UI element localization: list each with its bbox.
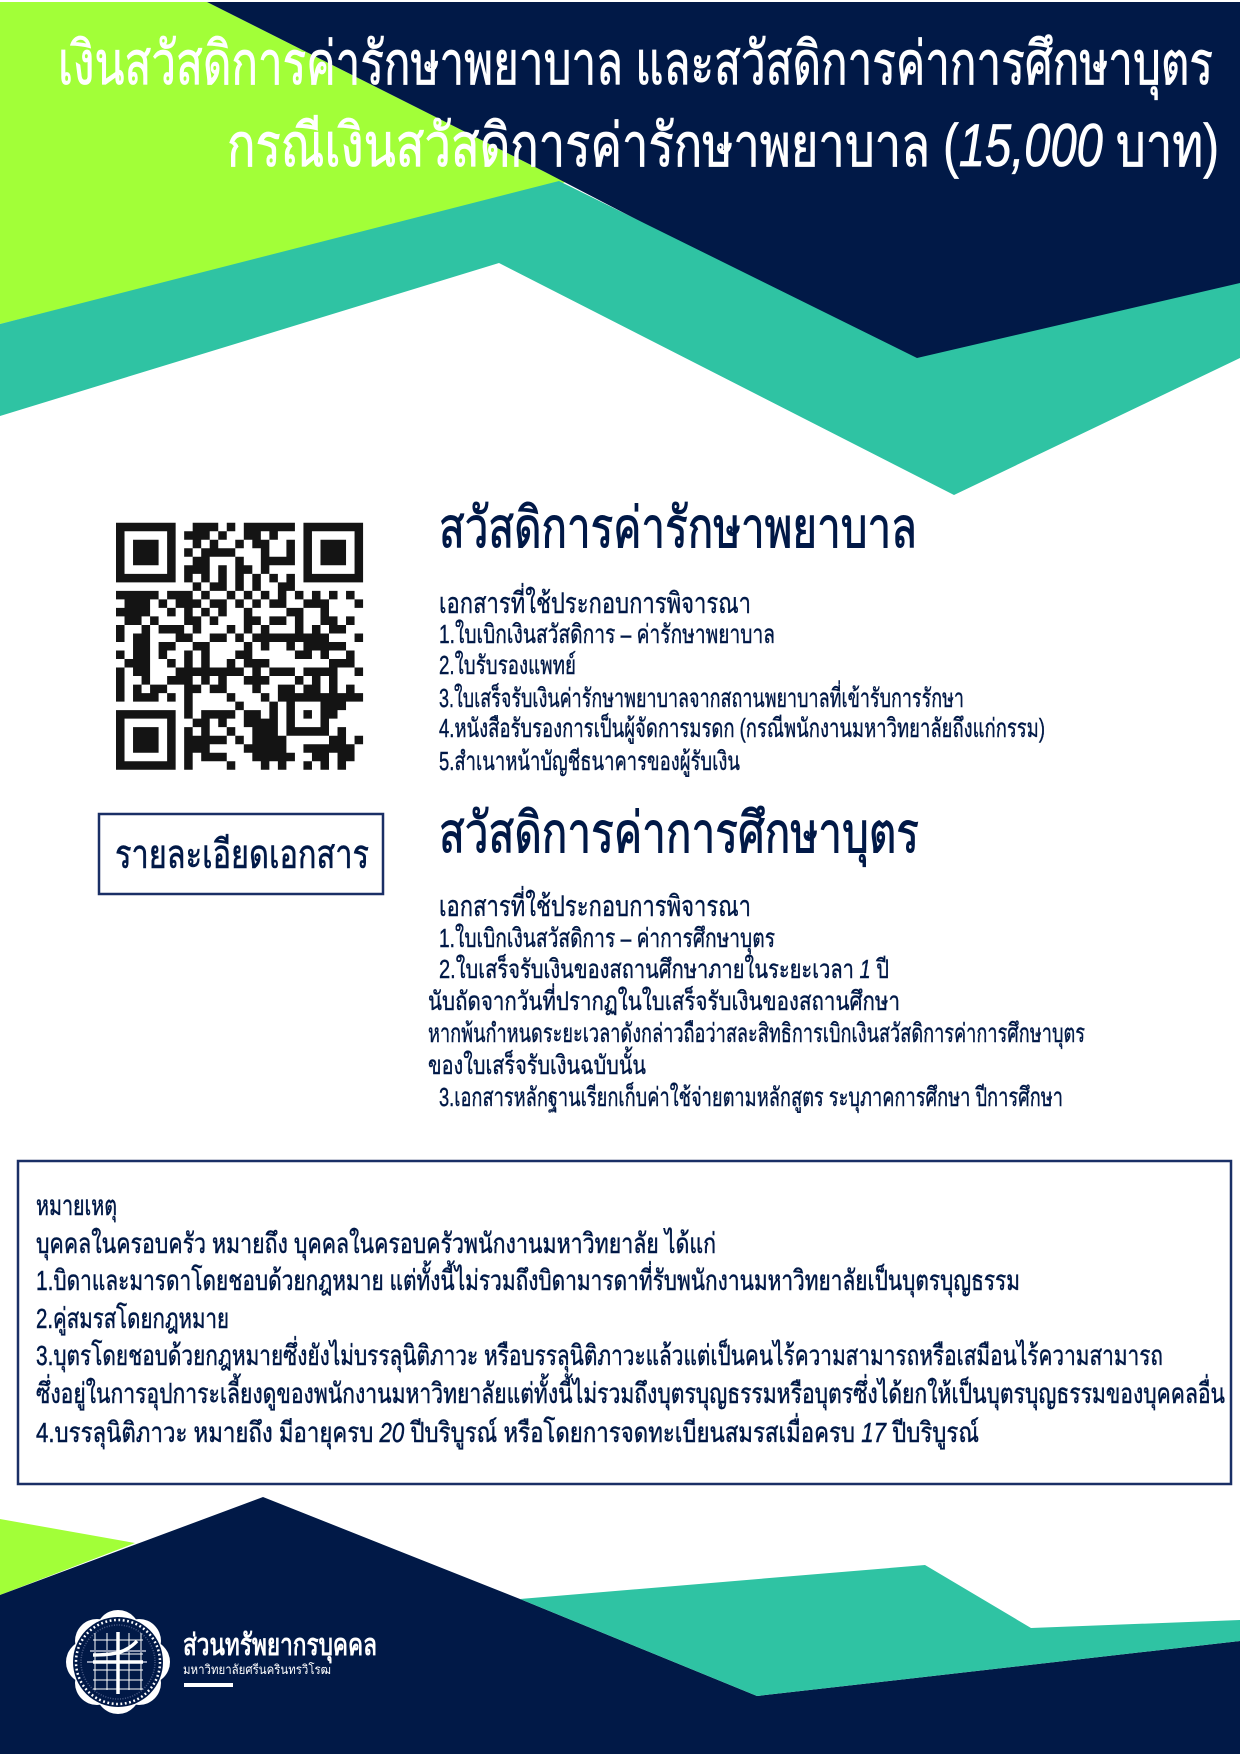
panel: remarks: หมายเหตุ — [36, 1190, 117, 1223]
document list: child education welfare: นับถัดจากวันที่ปรากฏในใบเสร็จรับเงินของสถานศึกษา — [428, 983, 900, 1016]
panel: remarks: บุคคลในครอบครัว หมายถึง บุคคลในครอบครัวพนักงานมหาวิทยาลัย ได้แก่ — [36, 1227, 716, 1261]
document list: child education welfare: ของใบเสร็จรับเงินฉบับนั้น — [428, 1046, 646, 1080]
button: document details — [99, 814, 383, 894]
department name: มหาวิทยาลัยศรีนครินทรวิโรฒ — [183, 1662, 331, 1677]
department name: ส่วนทรัพยากรบุคคล — [183, 1629, 377, 1664]
heading: child education welfare: สวัสดิการค่าการศึกษาบุตร — [439, 801, 919, 867]
document list: child education welfare — [428, 886, 1085, 1113]
heading: medical welfare: สวัสดิการค่ารักษาพยาบาล — [439, 496, 917, 559]
logo: university seal — [66, 1610, 170, 1714]
panel: remarks: 2.คู่สมรสโดยกฎหมาย — [36, 1302, 229, 1336]
title — [58, 30, 1219, 179]
document list: medical welfare: 1.ใบเบิกเงินสวัสดิการ – ค่ารักษาพยาบาล — [439, 619, 775, 649]
document list: medical welfare: 2.ใบรับรองแพทย์ — [439, 650, 576, 680]
section: medical welfare — [439, 496, 1045, 777]
document list: medical welfare: 3.ใบเสร็จรับเงินค่ารักษาพยาบาลจากสถานพยาบาลที่เข้ารับการรักษา — [439, 680, 964, 713]
panel: remarks — [18, 1161, 1231, 1484]
document list: child education welfare: เอกสารที่ใช้ประกอบการพิจารณา — [439, 886, 751, 923]
department name — [183, 1629, 377, 1687]
section: child education welfare — [428, 801, 1085, 1113]
top background shapes — [0, 2, 1240, 495]
document list: medical welfare: เอกสารที่ใช้ประกอบการพิจารณา — [439, 583, 751, 620]
document list: medical welfare — [439, 583, 1045, 777]
document list: medical welfare: 5.สำเนาหน้าบัญชีธนาคารของผู้รับเงิน — [439, 746, 740, 777]
panel: remarks: 4.บรรลุนิติภาวะ หมายถึง มีอายุครบ 20 ปีบริบูรณ์ หรือโดยการจดทะเบียนสมรสเมื่อครบ 17 ปีบริบูรณ์ — [36, 1413, 979, 1450]
document list: child education welfare: 2.ใบเสร็จรับเงินของสถานศึกษาภายในระยะเวลา 1 ปี — [439, 953, 889, 984]
title: กรณีเงินสวัสดิการค่ารักษาพยาบาล (15,000 บาท) — [227, 112, 1219, 179]
document list: child education welfare: 1.ใบเบิกเงินสวัสดิการ – ค่าการศึกษาบุตร — [439, 923, 775, 954]
button: document details: รายละเอียดเอกสาร — [115, 833, 369, 877]
bottom background shapes — [0, 1497, 1240, 1754]
QR code — [116, 523, 363, 770]
